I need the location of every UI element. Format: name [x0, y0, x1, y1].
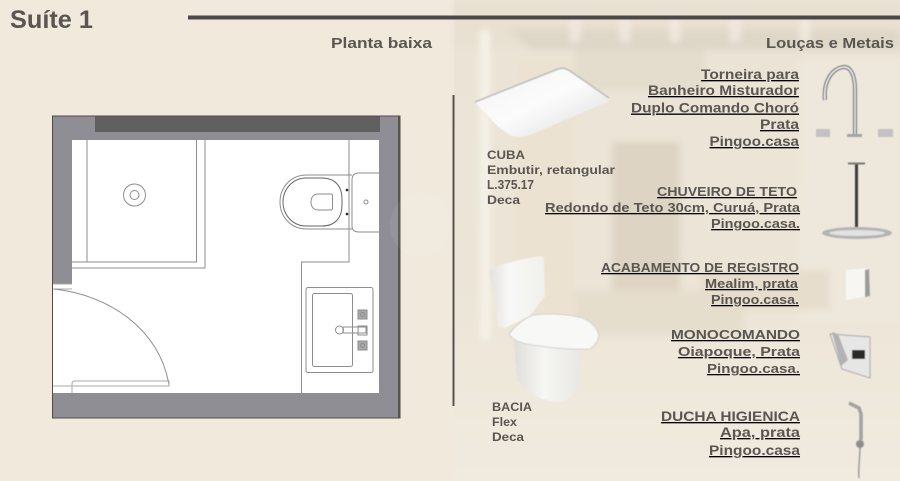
text: Ducha: [661, 409, 801, 458]
icon: ceiling shower: [822, 162, 892, 239]
icon: built-in sink: [475, 68, 610, 137]
text: BACIA: Flex: [492, 415, 517, 429]
text: Ducha: Pingoo.casa: [709, 443, 801, 458]
icon: shower valve trim: [846, 268, 870, 300]
heading: Planta baixa: Planta baixa: [331, 35, 433, 52]
text: Acabamento: [601, 260, 799, 307]
header rule: [188, 16, 900, 20]
floor plan: [52, 116, 400, 418]
heading: Louças e Metais: Louças e Metais: [766, 35, 894, 52]
text: Monocomando: [671, 327, 801, 376]
watermark: [390, 193, 450, 257]
text: Torneira: Torneira para: [701, 67, 800, 82]
text: Acabamento: Mealim, prata: [705, 276, 799, 291]
text: CUBA: L.375.17: [487, 178, 534, 192]
text: Monocomando: Pingoo.casa.: [707, 361, 800, 376]
text: CUBA: CUBA: [487, 148, 525, 162]
text: Torneira: Prata: [760, 117, 800, 132]
text: Monocomando: Oiapoque, Prata: [678, 344, 801, 359]
shower enclosure: [72, 140, 205, 268]
text: Torneira: Pingoo.casa: [710, 134, 800, 149]
text: Chuveiro: [545, 184, 801, 231]
text: Torneira: Banheiro Misturador: [648, 83, 800, 98]
walls: [52, 116, 400, 418]
icon: single-lever control: [830, 332, 870, 378]
door jamb: [53, 284, 72, 289]
text: Ducha: DUCHA HIGIENICA: [661, 409, 800, 424]
icon: toilet: [490, 256, 599, 402]
dark top band: [95, 116, 380, 132]
toilet bowl: [280, 175, 352, 229]
countertop outline: [302, 140, 349, 393]
text: CUBA: Embutir, retangular: [487, 163, 615, 177]
text: Torneira: Duplo Comando Choró: [631, 100, 799, 116]
text: Chuveiro: CHUVEIRO DE TETO: [657, 184, 797, 199]
text: Torneira: [631, 67, 800, 149]
panel: blurred bathroom backdrop: [454, 0, 900, 481]
text: BACIA: [492, 400, 532, 444]
text: Chuveiro: Pingoo.casa.: [711, 216, 800, 231]
text: CUBA: [487, 148, 615, 207]
text: CUBA: Deca: [487, 193, 520, 207]
door swing arc: [54, 289, 169, 385]
icon: faucet: [816, 67, 893, 137]
vanity sink: [306, 288, 373, 372]
vertical divider: [452, 95, 454, 406]
text: Chuveiro: Redondo de Teto 30cm, Curuá, Prata: [545, 200, 801, 215]
text: BACIA: BACIA: [492, 400, 532, 414]
text: Acabamento: ACABAMENTO DE REGISTRO: [601, 260, 799, 275]
text: BACIA: Deca: [492, 430, 524, 444]
room floor: [53, 140, 379, 393]
toilet tank: [352, 173, 379, 232]
icon: hand shower: [849, 403, 864, 478]
shower drain: [124, 184, 146, 206]
text: Ducha: Apa, prata: [720, 425, 801, 440]
text: Acabamento: Pingoo.casa.: [711, 292, 799, 307]
text: Monocomando: MONOCOMANDO: [671, 327, 800, 342]
title: Suíte 1: [10, 6, 93, 34]
door leaf: [53, 381, 169, 393]
